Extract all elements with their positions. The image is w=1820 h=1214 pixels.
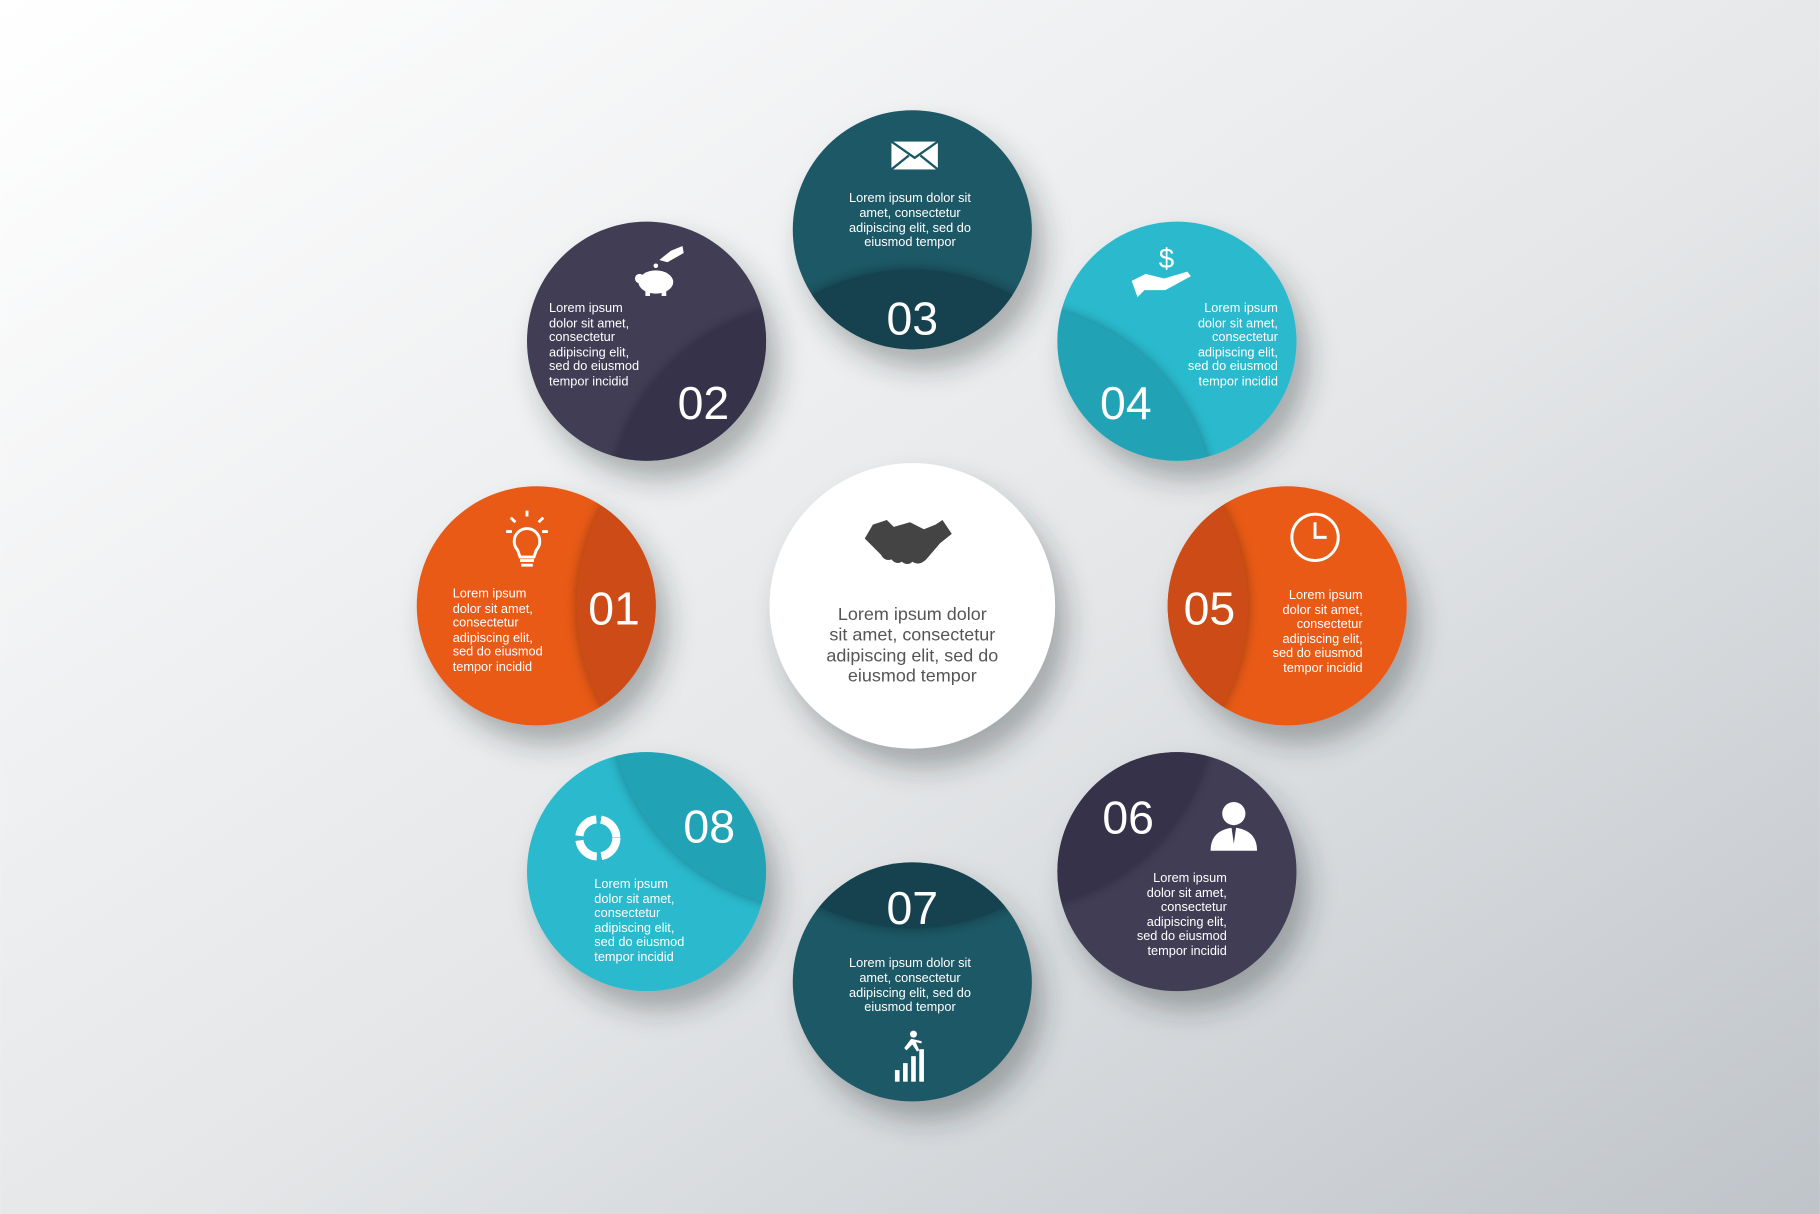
- center circle: [770, 463, 1055, 749]
- step 08: adipiscing elit,: [594, 920, 674, 935]
- center text: [826, 604, 998, 685]
- step 04: Lorem ipsum: [1204, 300, 1278, 315]
- step 04: sed do eiusmod: [1188, 358, 1278, 373]
- step 04: tempor incidid: [1199, 373, 1278, 388]
- step 07: [788, 862, 1060, 1136]
- step 02: tempor incidid: [549, 373, 628, 388]
- step 03: amet, consectetur: [859, 205, 961, 220]
- step 08: 08: [683, 801, 735, 853]
- step 06: [1053, 752, 1324, 1026]
- step 06: 06: [1102, 791, 1154, 843]
- step 07: adipiscing elit, sed do: [849, 985, 971, 1000]
- step 01: Lorem ipsum: [453, 586, 526, 601]
- center text: sit amet, consectetur: [829, 625, 995, 645]
- step 01: [412, 486, 683, 760]
- icon: refresh: [579, 819, 616, 857]
- step 04: adipiscing elit,: [1198, 344, 1278, 359]
- step 03: adipiscing elit, sed do: [849, 220, 971, 235]
- icon: handshake: [865, 520, 952, 564]
- step 06: adipiscing elit,: [1147, 914, 1227, 929]
- icon: clock: [1292, 514, 1338, 561]
- step 07: Lorem ipsum dolor sit: [849, 955, 971, 970]
- step 02: Lorem ipsum: [549, 300, 623, 315]
- icon: light bulb: [506, 511, 548, 565]
- step 07: 07: [887, 882, 938, 934]
- step 05: sed do eiusmod: [1273, 645, 1363, 660]
- step 02: 02: [678, 377, 729, 429]
- step 08: consectetur: [594, 905, 661, 920]
- step 08: Lorem ipsum: [594, 876, 668, 891]
- step 02: sed do eiusmod: [549, 358, 639, 373]
- step 03: 03: [887, 292, 938, 344]
- step 05: 05: [1184, 582, 1235, 634]
- step 08: sed do eiusmod: [594, 934, 684, 949]
- step 04: consectetur: [1212, 329, 1279, 344]
- step 04: 04: [1100, 377, 1152, 429]
- step 01: sed do eiusmod: [453, 644, 543, 659]
- icon: envelope: [891, 142, 938, 169]
- center text: Lorem ipsum dolor: [838, 604, 987, 624]
- step 08: dolor sit amet,: [594, 891, 674, 906]
- step 05: dolor sit amet,: [1283, 602, 1363, 617]
- center text: adipiscing elit, sed do: [826, 646, 998, 666]
- icon: money hand: [1132, 243, 1191, 297]
- step 02: [522, 222, 794, 495]
- step 03: [788, 110, 1060, 384]
- step 04: dolor sit amet,: [1198, 315, 1278, 330]
- step 03: eiusmod tempor: [864, 234, 956, 249]
- step 06: sed do eiusmod: [1137, 928, 1227, 943]
- step 07: amet, consectetur: [859, 970, 961, 985]
- step 05: [1163, 486, 1434, 760]
- step 02: adipiscing elit,: [549, 344, 629, 359]
- step 08: [522, 752, 794, 1026]
- icon: money hand: $: [1159, 243, 1175, 274]
- step 02: dolor sit amet,: [549, 315, 629, 330]
- step 02: consectetur: [549, 329, 616, 344]
- step 07: eiusmod tempor: [864, 999, 956, 1014]
- step 05: tempor incidid: [1283, 660, 1363, 675]
- step 05: consectetur: [1297, 616, 1363, 631]
- center text: eiusmod tempor: [848, 665, 977, 685]
- icon: businessman: [1211, 802, 1257, 851]
- step 01: consectetur: [453, 615, 519, 630]
- icon: growth: [895, 1031, 924, 1082]
- step 01: dolor sit amet,: [453, 601, 533, 616]
- step 06: Lorem ipsum: [1153, 870, 1227, 885]
- step 04: [1053, 222, 1324, 495]
- step 06: tempor incidid: [1147, 943, 1227, 958]
- step 06: consectetur: [1161, 899, 1228, 914]
- step 05: Lorem ipsum: [1289, 587, 1363, 602]
- step 08: tempor incidid: [594, 949, 674, 964]
- step 01: adipiscing elit,: [453, 630, 533, 645]
- step 05: adipiscing elit,: [1283, 631, 1363, 646]
- step 03: Lorem ipsum dolor sit: [849, 190, 971, 205]
- icon: piggy bank: [635, 246, 684, 296]
- step 06: dolor sit amet,: [1147, 885, 1227, 900]
- step 01: tempor incidid: [453, 659, 532, 674]
- step 01: 01: [588, 582, 640, 634]
